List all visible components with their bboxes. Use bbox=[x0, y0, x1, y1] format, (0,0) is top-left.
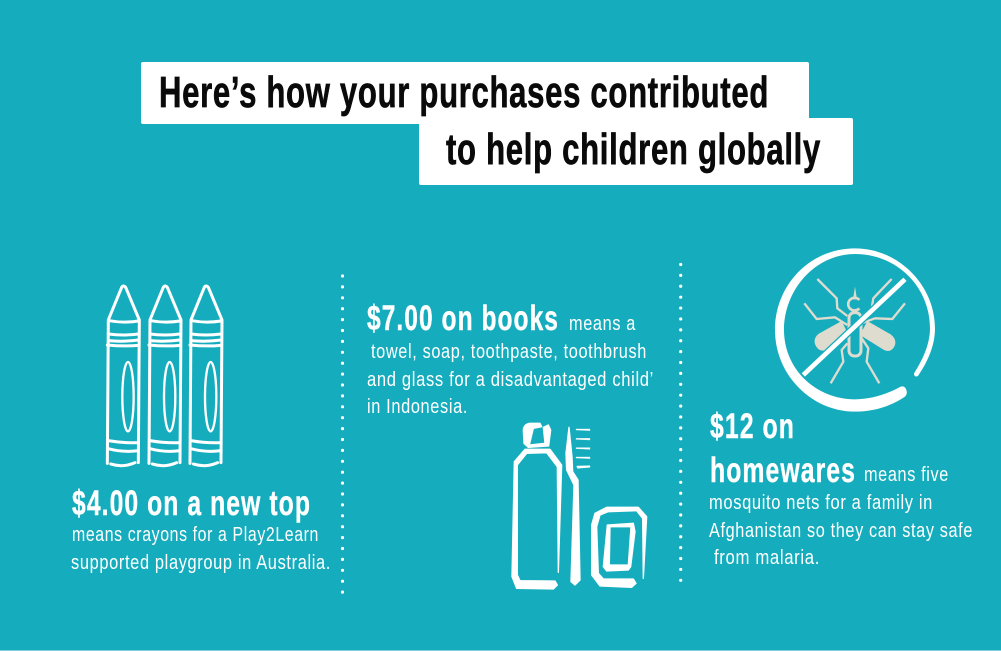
text: homewares: $12 on bbox=[710, 407, 795, 446]
text: new top: means crayons for a Play2Learn bbox=[72, 523, 319, 546]
text: books: $7.00 on books bbox=[367, 299, 559, 338]
text: new top: supported playgroup in Australia. bbox=[71, 551, 331, 574]
panel: new top bbox=[71, 286, 331, 574]
panel: homewares bbox=[709, 248, 973, 569]
text: homewares: mosquito nets for a family in bbox=[709, 491, 933, 514]
icon: toothpaste, toothbrush and soap bbox=[512, 423, 647, 589]
title: to help children globally bbox=[446, 125, 821, 174]
divider: right dotted line bbox=[679, 264, 682, 581]
icon: crayons bbox=[107, 286, 222, 466]
text: new top: $4.00 on a new top bbox=[72, 484, 311, 523]
text: books: in Indonesia. bbox=[367, 395, 468, 418]
text: homewares: from malaria. bbox=[714, 546, 820, 569]
text: new top bbox=[71, 484, 331, 574]
icon: crossed-out mosquito bbox=[775, 248, 935, 412]
text: homewares bbox=[709, 407, 973, 569]
text: homewares: means five bbox=[864, 463, 949, 486]
title bbox=[141, 62, 853, 185]
text: books: towel, soap, toothpaste, toothbrush bbox=[371, 340, 647, 363]
text: homewares: homewares bbox=[710, 451, 856, 490]
title: Here’s how your purchases contributed bbox=[159, 68, 769, 117]
text: books bbox=[367, 299, 654, 418]
divider: left dotted line bbox=[341, 276, 344, 593]
text: books: and glass for a disadvantaged child’ bbox=[367, 368, 654, 391]
text: books: means a bbox=[569, 312, 636, 335]
panel: books bbox=[367, 299, 654, 589]
